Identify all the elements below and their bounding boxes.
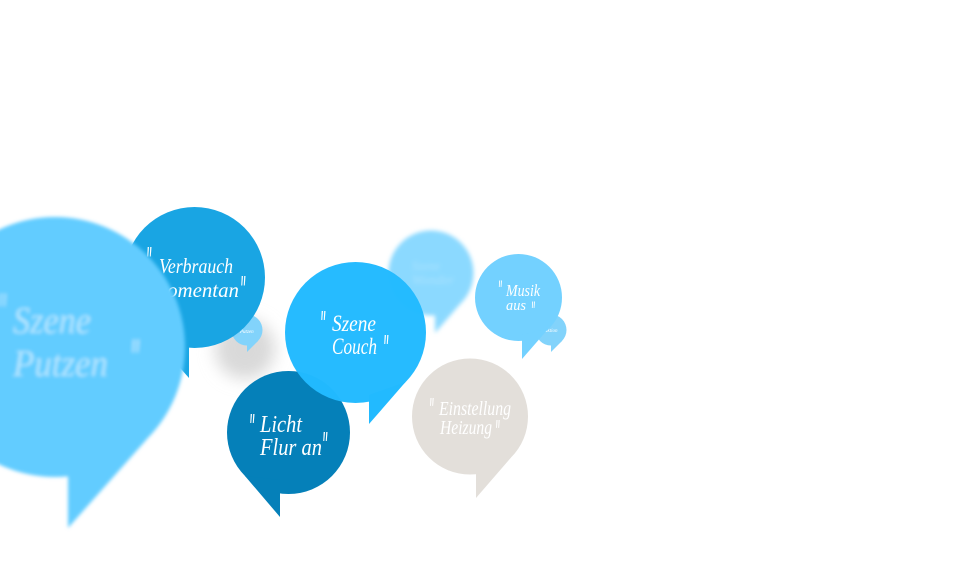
small bubble: right: aktion bbox=[545, 329, 558, 334]
small bubble: right bbox=[536, 314, 566, 352]
bubble: Verbrauch momentan: " bbox=[240, 265, 246, 315]
bubble: Einstellung Heizung: " bbox=[495, 413, 500, 453]
bubble: Szene Couch: Szene bbox=[332, 311, 376, 336]
blurred bubble: top centre: Szene bbox=[412, 258, 440, 273]
bubble: Verbrauch momentan bbox=[124, 207, 265, 378]
blurred bubble: Szene Putzen (large): Szene bbox=[13, 300, 91, 342]
blurred bubble: top centre bbox=[388, 230, 474, 333]
bubble: Verbrauch momentan: Verbrauch bbox=[159, 254, 233, 278]
bubble: Musik aus: " bbox=[531, 295, 535, 329]
bubble: Szene Couch: " bbox=[383, 326, 389, 373]
bubble: Szene Couch: " bbox=[320, 302, 326, 349]
bubble: Szene Couch bbox=[285, 262, 426, 424]
blurred bubble: Szene Putzen (large) bbox=[0, 217, 185, 528]
blurred bubble: Szene Putzen (large): Putzen bbox=[12, 343, 108, 385]
bubble: Musik aus bbox=[475, 254, 562, 359]
bubble: Musik aus: Musik bbox=[505, 281, 540, 300]
bubble: Musik aus: aus bbox=[506, 298, 526, 314]
bubble: Licht Flur an: Flur an bbox=[259, 435, 322, 461]
blurred bubble: Szene Putzen (large): " bbox=[130, 327, 139, 394]
bubble: Licht Flur an: " bbox=[322, 423, 328, 470]
bubble: Einstellung Heizung: Heizung bbox=[439, 417, 492, 439]
bubble: Szene Couch: Couch bbox=[332, 334, 377, 359]
bubble: Licht Flur an: Licht bbox=[259, 412, 303, 438]
shadow behind small bubble bbox=[215, 319, 275, 379]
bubble: Einstellung Heizung: " bbox=[429, 391, 434, 431]
bubble: Verbrauch momentan: momentan bbox=[152, 278, 239, 302]
bubble: Licht Flur an bbox=[227, 371, 350, 517]
bubble: Einstellung Heizung: Einstellung bbox=[438, 398, 511, 420]
bubble: Musik aus: " bbox=[498, 274, 502, 308]
blurred bubble: top centre: Wonder bbox=[412, 272, 455, 287]
bubble: Einstellung Heizung bbox=[412, 358, 528, 498]
bubble: Verbrauch momentan: " bbox=[146, 236, 152, 286]
small bubble: Szene Putzen (left) bbox=[232, 314, 262, 352]
bubble: Licht Flur an: " bbox=[249, 405, 255, 452]
small bubble: Szene Putzen (left): Putzen bbox=[239, 330, 254, 335]
